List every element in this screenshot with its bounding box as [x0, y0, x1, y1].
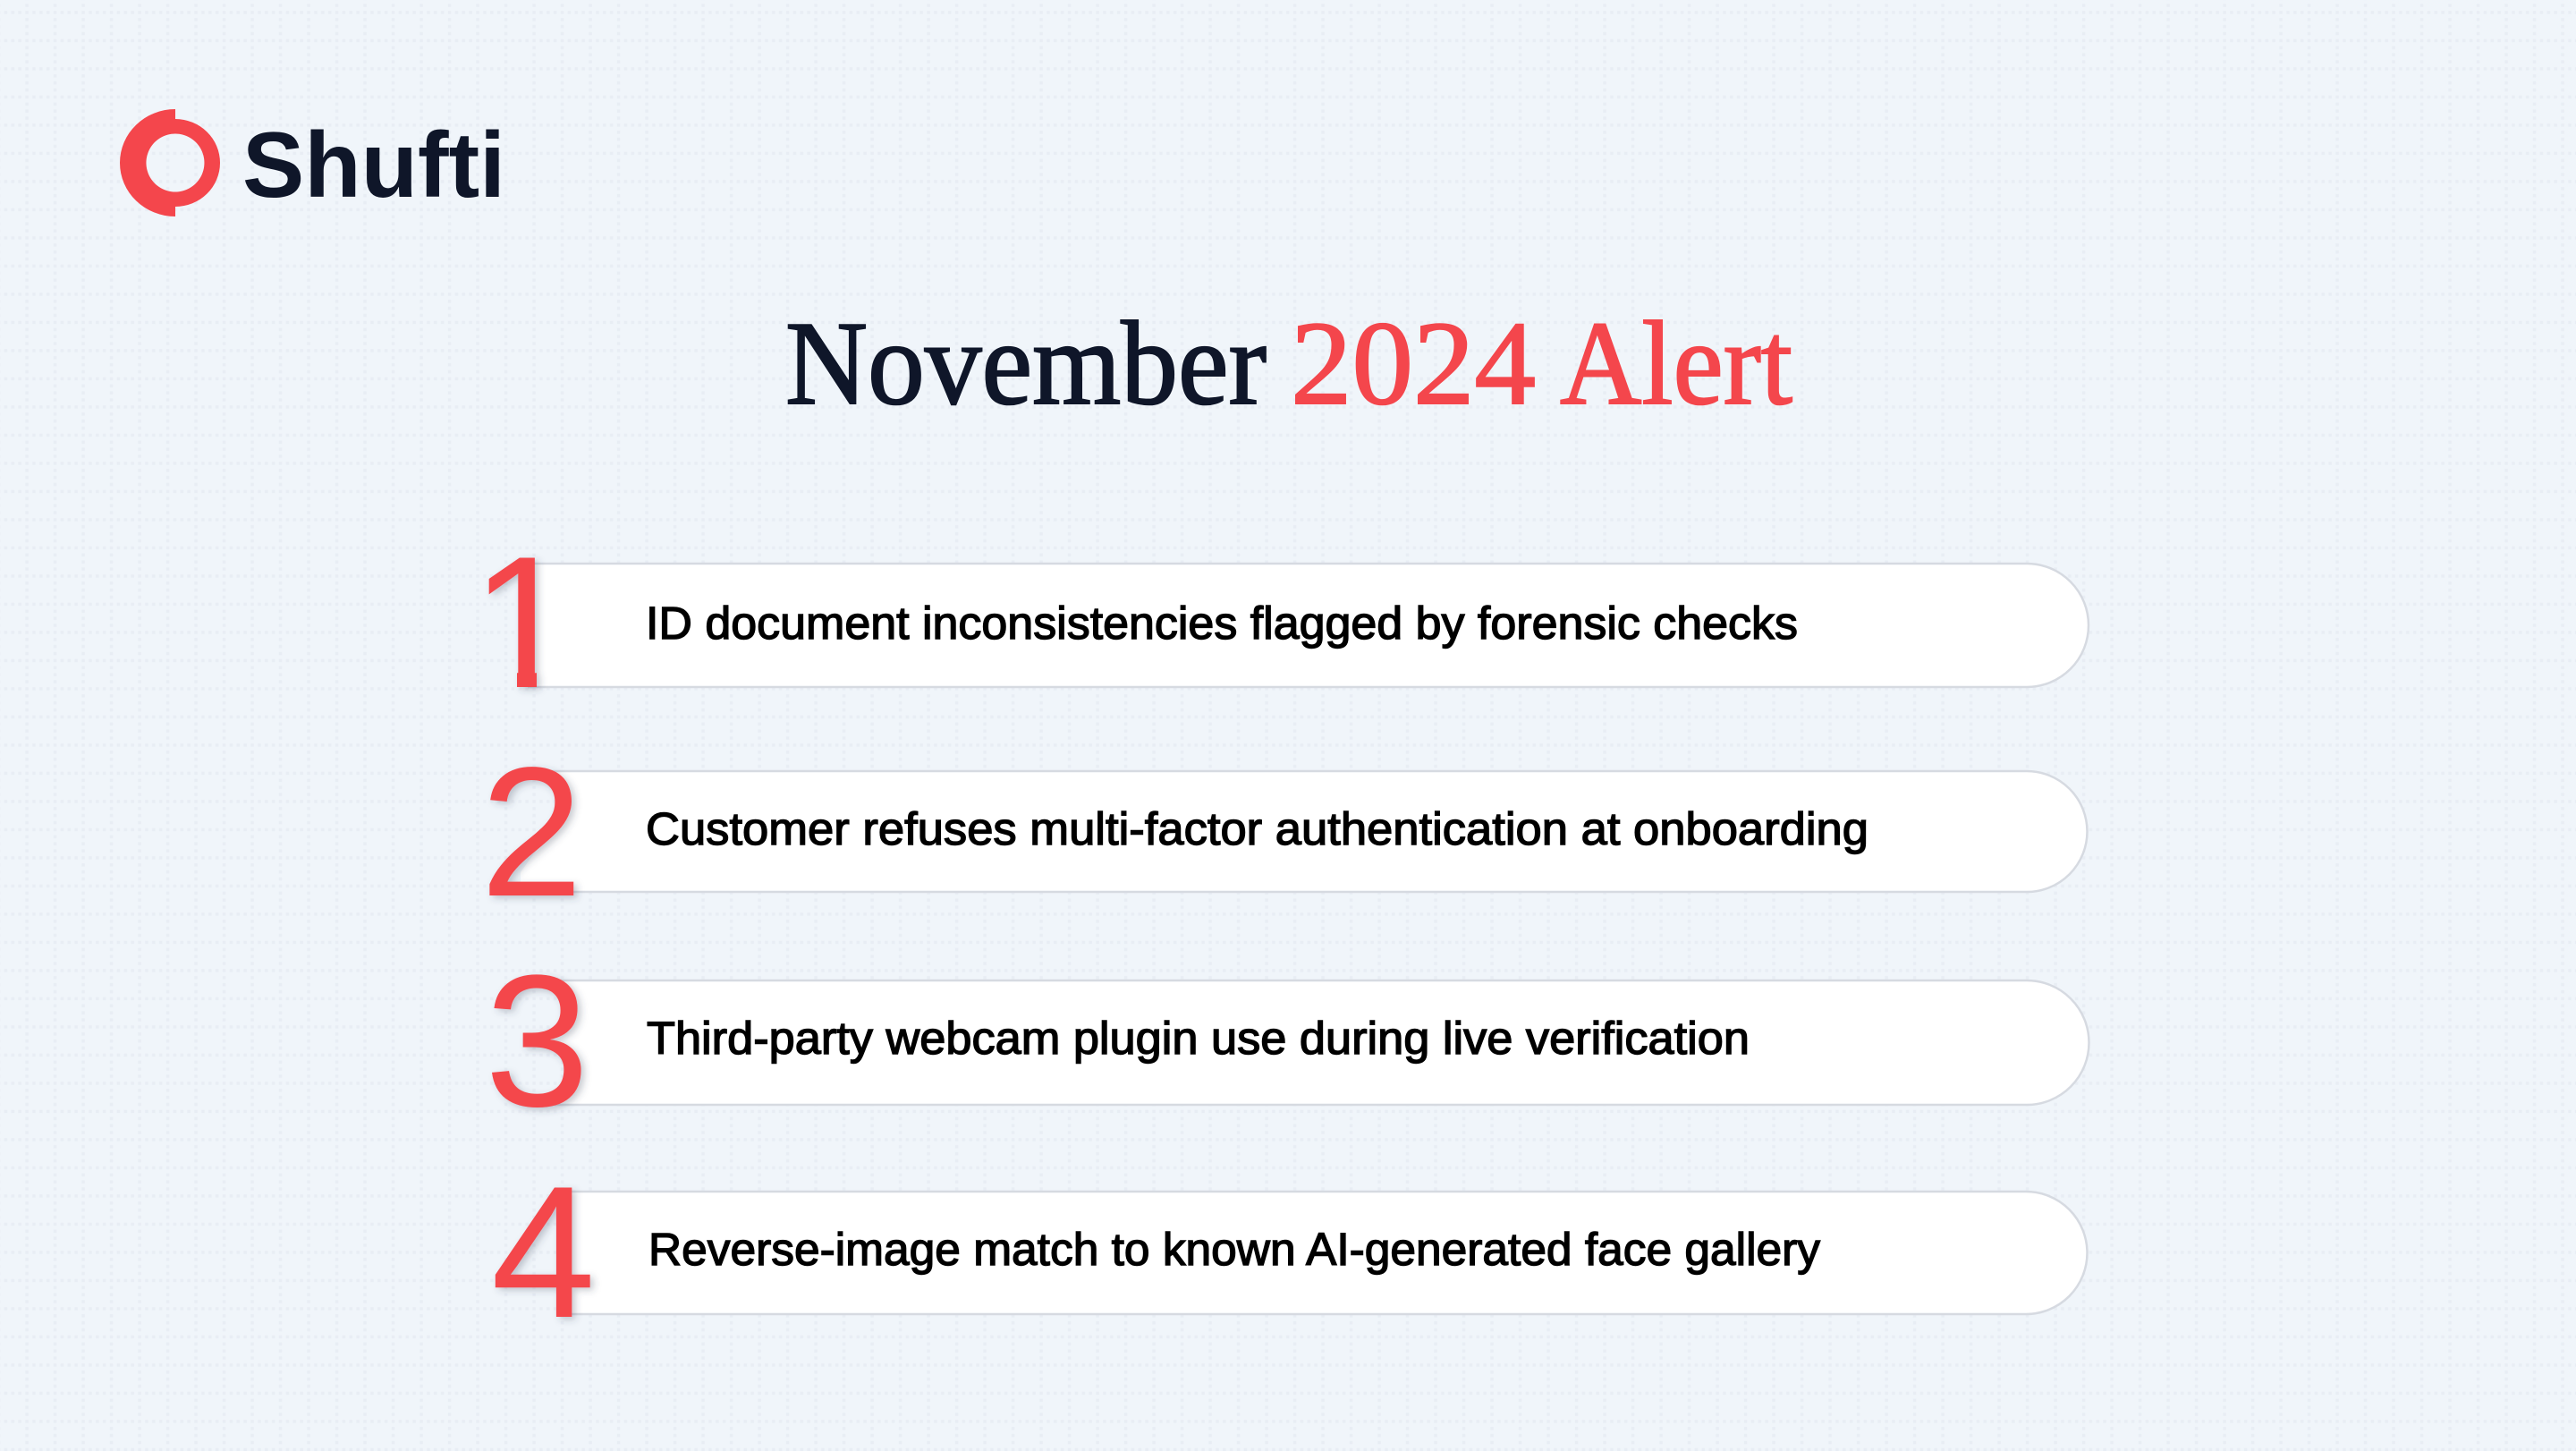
pill 2	[521, 771, 2088, 892]
list item 4	[491, 1147, 2088, 1357]
icon: logo ring	[120, 109, 220, 216]
title: November	[785, 297, 1267, 429]
number 3: 3	[485, 936, 589, 1146]
pill 4	[565, 1192, 2088, 1314]
text 2: Customer refuses multi-factor authentication at onboarding	[646, 803, 1868, 854]
pill 1	[528, 564, 2089, 687]
list item 2	[480, 729, 2088, 935]
number 2: 2	[480, 729, 583, 935]
pill 3	[553, 980, 2089, 1105]
text 3: Third-party webcam plugin use during live verification	[647, 1013, 1750, 1064]
title: 2024	[1291, 297, 1536, 429]
title: Alert	[1560, 297, 1792, 429]
number 1: 1	[470, 517, 575, 727]
list item 3	[485, 936, 2089, 1146]
text 1: ID document inconsistencies flagged by forensic checks	[646, 598, 1798, 649]
number 4: 4	[491, 1147, 596, 1357]
logo wordmark: Shufti	[242, 114, 505, 217]
list item 1	[470, 517, 2089, 727]
text 4: Reverse-image match to known AI-generated face gallery	[648, 1224, 1820, 1275]
title	[785, 297, 1792, 429]
logo: Shufti	[120, 109, 505, 217]
